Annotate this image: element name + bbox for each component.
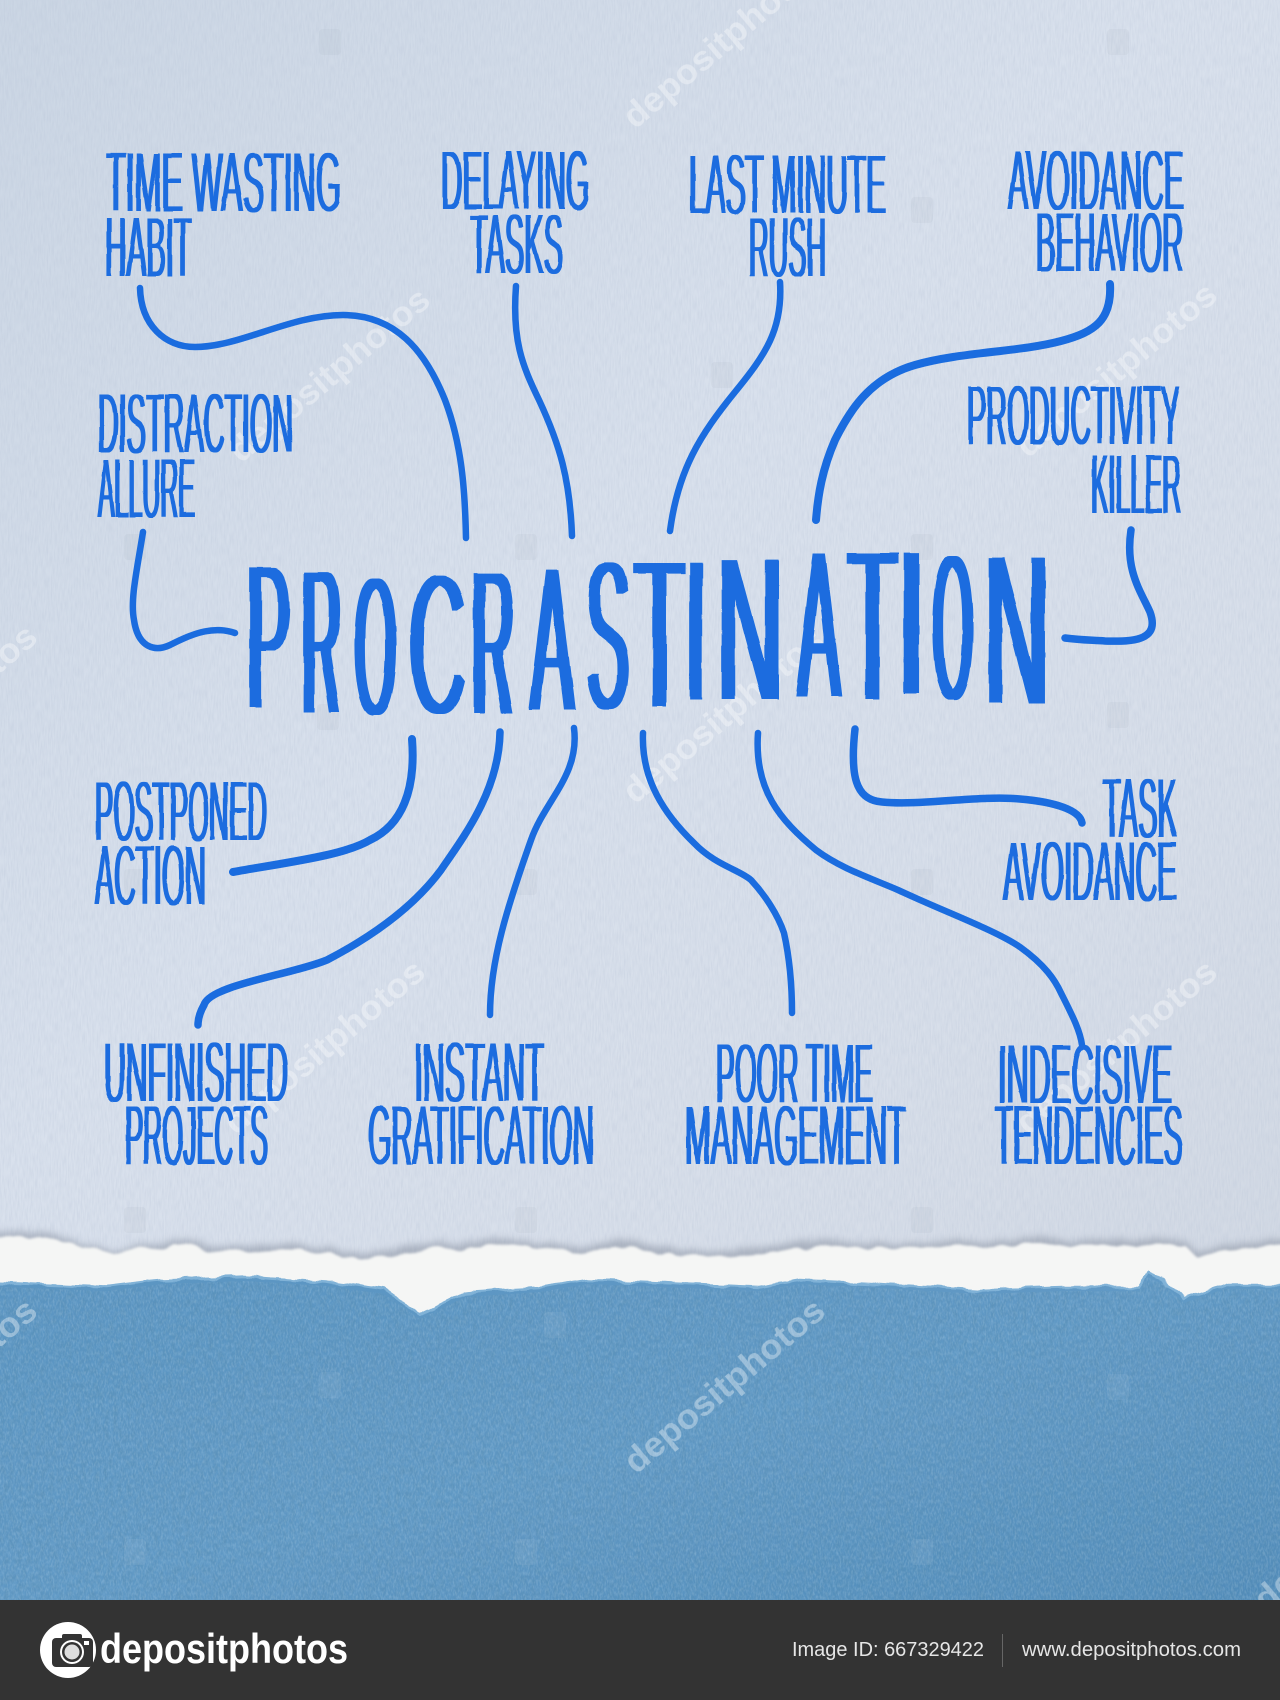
label: last minute rush: RUSH [749,200,826,296]
torn white paper edge [0,1232,1280,1320]
labels: TASKS [470,197,563,293]
connector: unfinished projects [198,732,500,1025]
image id: Image ID: 667329422 [792,1639,984,1661]
logo wordmark: depositphotos [100,1625,348,1672]
title: PROCRASTINATION: S [587,515,629,756]
label: distraction allure: ALLURE [98,441,195,537]
label: poor time management [685,1026,906,1184]
title: PROCRASTINATION: R [472,524,514,761]
connector: task avoidance [853,729,1082,823]
connector: time wasting habit [140,288,466,538]
label: last minute rush [689,137,886,296]
labels: UNFINISHED [104,1025,288,1121]
title: PROCRASTINATION: T [634,513,685,756]
label: instant gratification [368,1025,594,1184]
labels: TIME WASTING [106,135,341,231]
label: indecisive tendencies [995,1027,1183,1184]
labels [95,133,1184,1184]
title: PROCRASTINATION: N [717,511,783,748]
label: avoidance behavior [1008,133,1184,291]
labels: GRATIFICATION [368,1088,594,1184]
connector: distraction allure [133,532,235,648]
labels: POOR TIME [716,1026,873,1122]
labels: DELAYING [441,133,589,229]
title: PROCRASTINATION: N [984,507,1049,753]
labels: POSTPONED [95,764,267,860]
panel: pale paper background [0,0,1280,1290]
label: task avoidance [1003,761,1177,920]
faint watermark camera icons [124,29,1129,1565]
connector: last minute rush [670,282,780,531]
icon: camera logo [40,1622,96,1678]
label: unfinished projects [104,1025,288,1184]
title: PROCRASTINATION: R [302,523,341,760]
labels: INSTANT [414,1025,544,1121]
title: PROCRASTINATION: O [933,509,973,746]
title: PROCRASTINATION: A [798,505,840,747]
connector: postponed action [233,739,413,872]
label: postponed action: ACTION [95,828,206,924]
labels: DISTRACTION [98,376,293,472]
watermarks: depositphotos [1008,952,1225,1142]
connector: instant gratification [490,728,575,1015]
connector: avoidance behavior [816,284,1110,520]
connector: productivity killer [1065,530,1152,641]
connector: poor time management [643,733,792,1013]
label: distraction allure [98,376,293,537]
watermarks: depositphotos [615,621,832,811]
footer bar [0,1600,1280,1700]
title: PROCRASTINATION: I [898,505,925,742]
title: PROCRASTINATION: O [355,534,396,760]
watermarks: depositphotos [616,1291,833,1481]
watermarks: depositphotos [221,280,438,470]
website url: www.depositphotos.com [1021,1639,1241,1661]
watermarks: depositphotos [1008,275,1225,465]
label: productivity killer [967,368,1181,533]
title: PROCRASTINATION: C [410,530,466,759]
title: PROCRASTINATION [247,503,1049,761]
title: PROCRASTINATION: A [530,522,573,759]
connector: delaying tasks [515,286,572,536]
label: postponed action [95,764,267,924]
connector: indecisive tendencies [758,733,1082,1045]
connector lines [133,282,1152,1045]
labels: PROJECTS [125,1088,268,1184]
label: time wasting habit: HABIT [105,200,192,296]
title: PROCRASTINATION: P [247,521,290,756]
title: PROCRASTINATION: T [848,503,897,750]
title: PROCRASTINATION: I [686,515,706,749]
label: delaying tasks [441,133,589,293]
watermarks: depositphotos [216,952,433,1142]
label: time wasting habit [105,135,341,296]
labels: LAST MINUTE [689,137,886,233]
panel: blue paper background [0,1270,1280,1620]
